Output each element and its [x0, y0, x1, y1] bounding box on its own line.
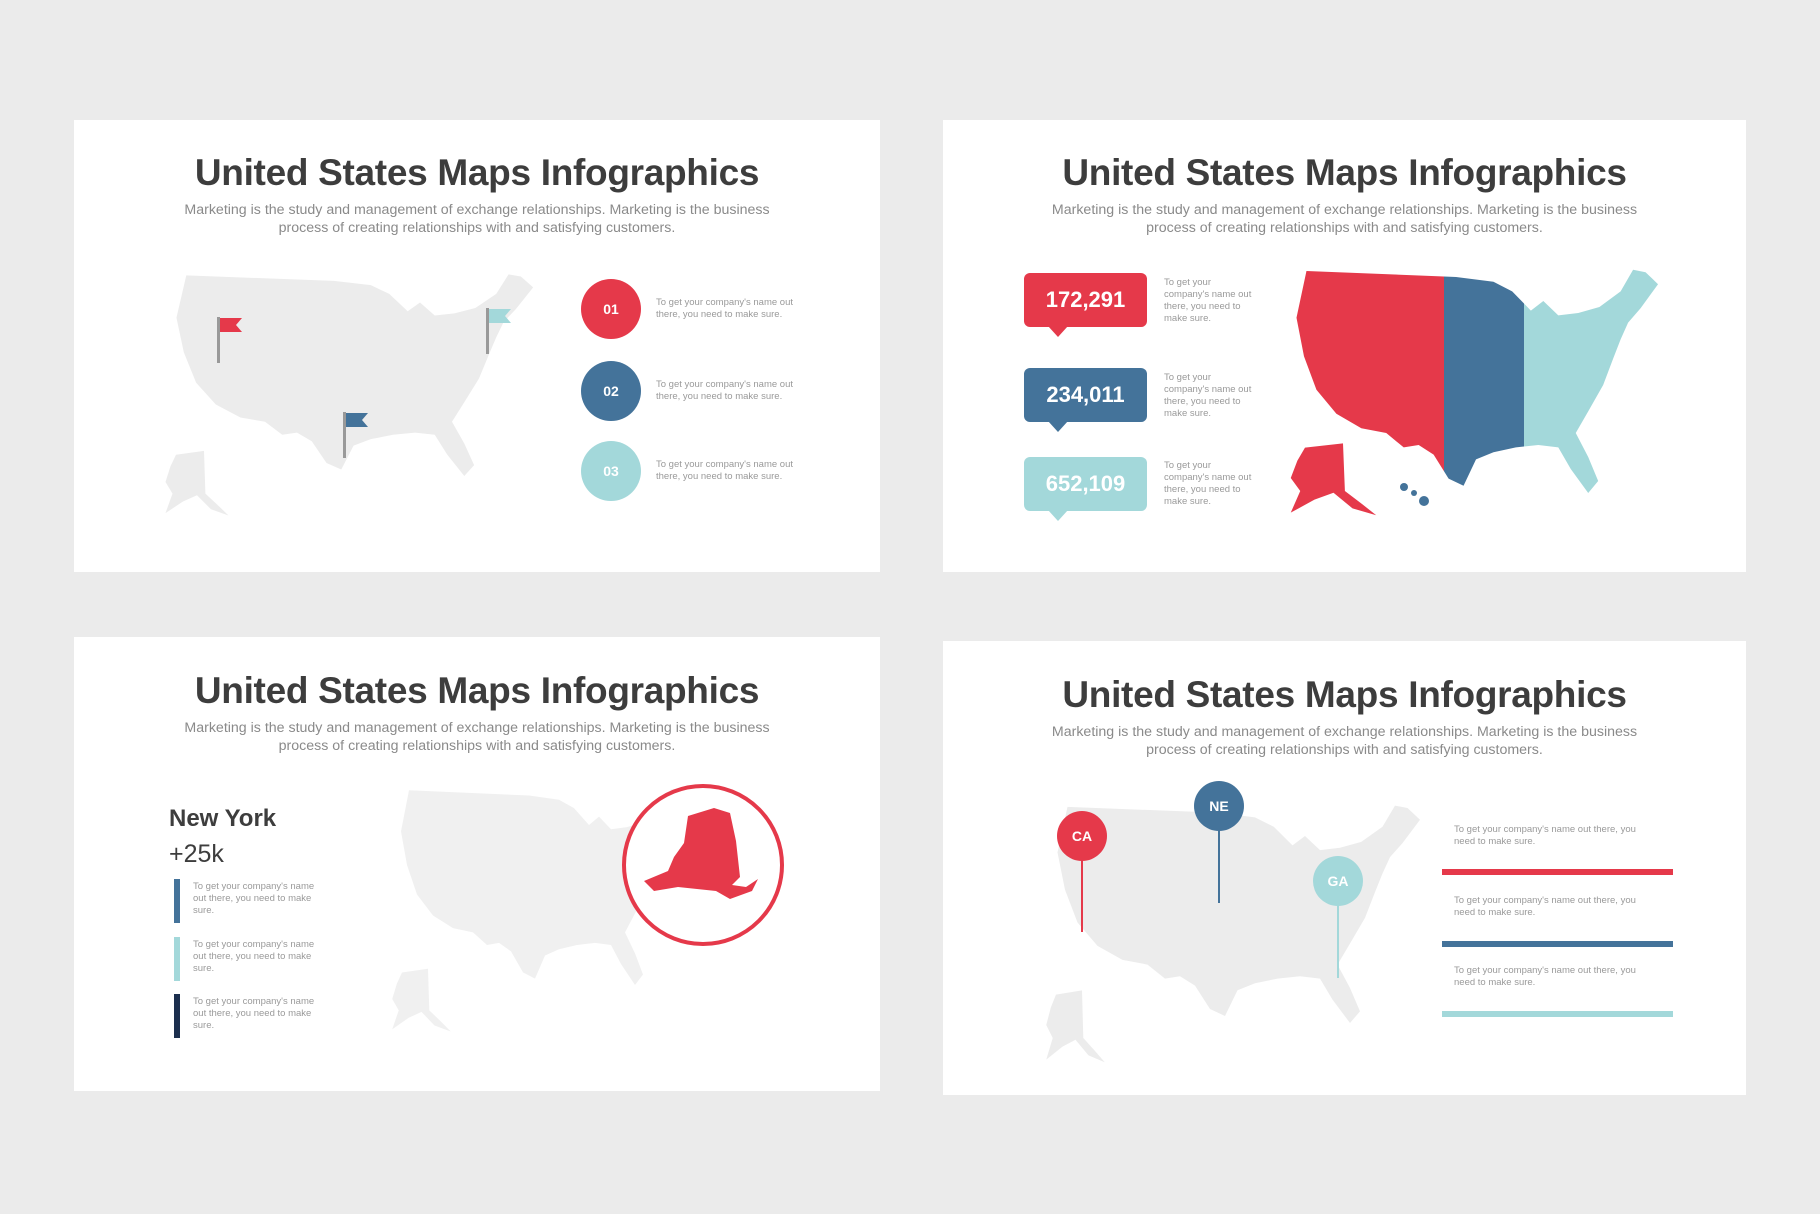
item 02 [581, 361, 793, 421]
stat 234,011: make sure. [1164, 408, 1211, 419]
item 03: there, you need to make sure. [656, 471, 782, 482]
item 01: 01 [603, 301, 619, 317]
pin CA: CA [1072, 828, 1092, 844]
legend lines: need to make sure. [1454, 907, 1535, 918]
stat 234,011: there, you need to [1164, 396, 1241, 407]
stat 172,291 [1024, 273, 1252, 337]
notes: sure. [193, 905, 214, 916]
item 01: there, you need to make sure. [656, 309, 782, 320]
stat 234,011: company's name out [1164, 384, 1251, 395]
notes [174, 879, 314, 1038]
stat 652,109 [1024, 457, 1252, 521]
legend lines [1442, 824, 1673, 1017]
pin CA [1057, 811, 1107, 932]
stat 172,291: company's name out [1164, 289, 1251, 300]
item 01 [581, 279, 793, 339]
title: United States Maps Infographics [195, 152, 759, 193]
subtitle [1052, 724, 1637, 758]
gray map [392, 790, 672, 1031]
notes: out there, you need to make [193, 893, 311, 904]
map with pins [1046, 781, 1420, 1062]
subtitle: process of creating relationships with and satisfying customers. [1146, 742, 1543, 758]
subtitle: Marketing is the study and management of exchange relationships. Marketing is the business [184, 202, 770, 218]
subtitle [184, 202, 770, 236]
stat 172,291: make sure. [1164, 313, 1211, 324]
stat 172,291: To get your [1164, 277, 1211, 288]
item 02: To get your company's name out [656, 379, 793, 390]
stat 652,109: 652,109 [1046, 471, 1125, 496]
title: United States Maps Infographics [195, 670, 759, 711]
notes: To get your company's name [193, 939, 314, 950]
colored map [1290, 270, 1658, 516]
subtitle: process of creating relationships with and satisfying customers. [279, 738, 675, 754]
pin GA [1313, 856, 1363, 978]
notes: sure. [193, 1020, 214, 1031]
item 01: To get your company's name out [656, 297, 793, 308]
legend lines: need to make sure. [1454, 836, 1535, 847]
stat 234,011: 234,011 [1046, 382, 1125, 407]
subtitle: process of creating relationships with and satisfying customers. [1146, 220, 1543, 236]
item 03: To get your company's name out [656, 459, 793, 470]
panel: flags map [74, 120, 880, 572]
notes: out there, you need to make [193, 951, 311, 962]
notes: sure. [193, 963, 214, 974]
flag blue [343, 412, 368, 458]
notes: To get your company's name [193, 881, 314, 892]
stat 234,011 [1024, 368, 1252, 432]
stat 652,109: make sure. [1164, 496, 1211, 507]
title: United States Maps Infographics [1062, 674, 1627, 715]
flag teal [486, 308, 511, 354]
panel: New York [74, 637, 880, 1091]
panel: region numbers [943, 120, 1746, 572]
stat 652,109: there, you need to [1164, 484, 1241, 495]
legend lines: To get your company's name out there, you [1454, 895, 1636, 906]
pin GA: GA [1328, 873, 1348, 889]
pin NE: NE [1209, 798, 1229, 814]
notes: To get your company's name [193, 996, 314, 1007]
stat 234,011: To get your [1164, 372, 1211, 383]
subtitle: Marketing is the study and management of exchange relationships. Marketing is the business [1052, 202, 1637, 218]
legend lines: need to make sure. [1454, 977, 1535, 988]
subtitle: Marketing is the study and management of exchange relationships. Marketing is the business [1052, 724, 1637, 740]
subtitle [1052, 202, 1637, 236]
map with flags [166, 274, 533, 516]
item 03 [581, 441, 793, 501]
flag red [217, 317, 242, 363]
legend lines: To get your company's name out there, you [1454, 824, 1636, 835]
title: United States Maps Infographics [1062, 152, 1627, 193]
panel: pins [943, 641, 1746, 1095]
item 02: there, you need to make sure. [656, 391, 782, 402]
stat 172,291: there, you need to [1164, 301, 1241, 312]
item 02: 02 [603, 383, 619, 399]
subtitle: process of creating relationships with and satisfying customers. [279, 220, 675, 236]
NY circle [622, 784, 784, 946]
list items [581, 279, 793, 501]
pin NE [1194, 781, 1244, 903]
subtitle: Marketing is the study and management of exchange relationships. Marketing is the business [184, 720, 770, 736]
stat 652,109: company's name out [1164, 472, 1251, 483]
stat 172,291: 172,291 [1046, 287, 1125, 312]
value: +25k [169, 840, 224, 868]
state label: New York [169, 805, 276, 832]
notes: out there, you need to make [193, 1008, 311, 1019]
item 03: 03 [603, 463, 619, 479]
legend lines: To get your company's name out there, you [1454, 965, 1636, 976]
stat 652,109: To get your [1164, 460, 1211, 471]
subtitle [184, 720, 770, 754]
